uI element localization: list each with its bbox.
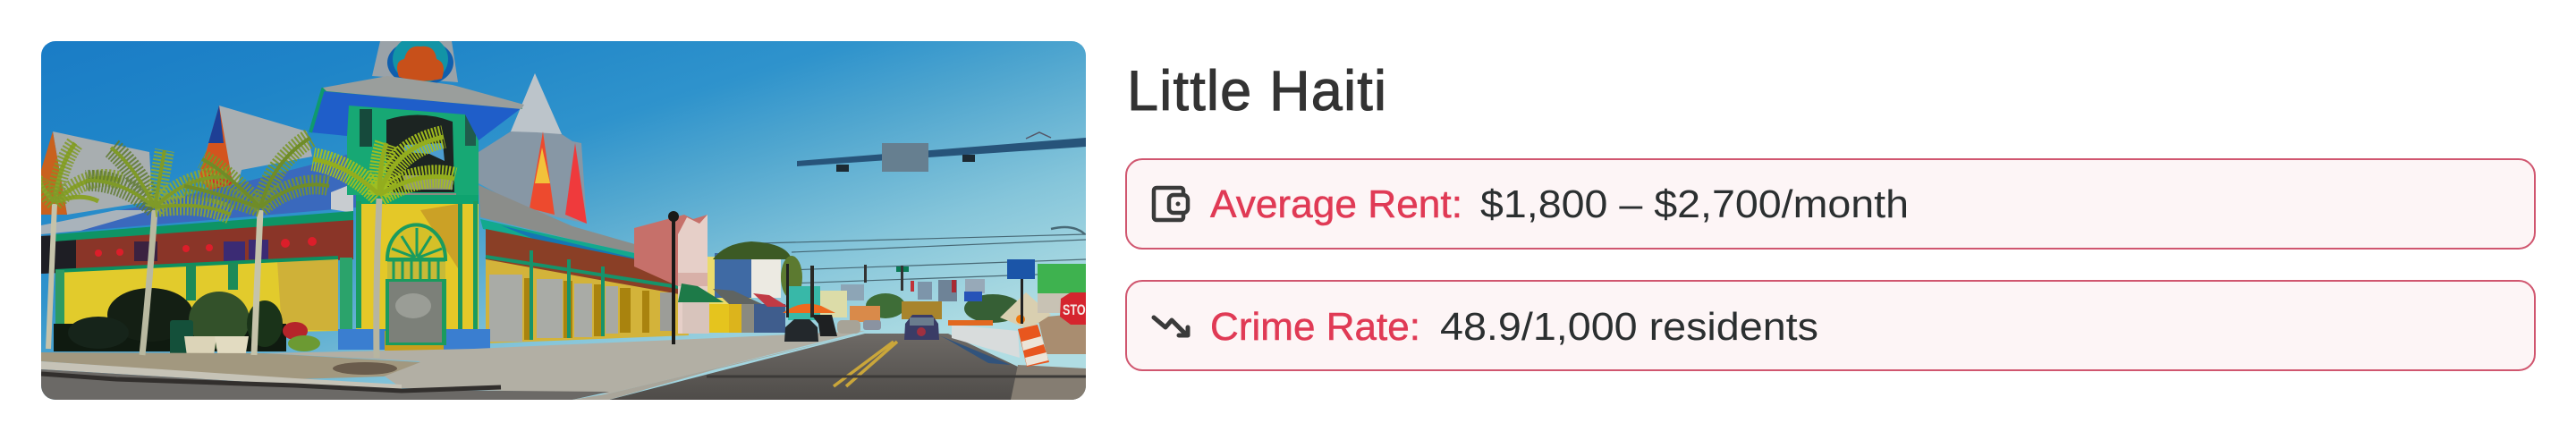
road construction: barrier, barrel, sand pile, signs	[939, 259, 1086, 367]
stop sign: STOP	[1063, 301, 1093, 318]
photo: Little Haiti street with colorful market building	[40, 35, 1093, 400]
sky	[41, 41, 1086, 400]
trash bin and planters	[170, 320, 249, 353]
palm 2	[86, 148, 231, 355]
overhead traffic signal arm	[797, 132, 1086, 172]
street buildings	[634, 215, 847, 334]
palm 3	[184, 138, 329, 355]
label: crime rate: Crime Rate:	[1210, 305, 1420, 349]
shrubs	[54, 288, 320, 351]
heading: Little Haiti: Little Haiti	[1127, 60, 1386, 123]
icon: wallet	[1154, 188, 1188, 220]
stat card: average rent	[1126, 159, 2535, 249]
tower upper: eave, roof and open belfry	[310, 76, 524, 199]
distant skyline and trees	[841, 265, 1021, 323]
main building lattice band	[41, 211, 353, 274]
back gables	[41, 106, 312, 215]
tower ornament	[372, 41, 458, 82]
right gables and roof	[479, 73, 634, 259]
stat card: crime rate	[1126, 281, 2535, 370]
tower arch and shutter door	[386, 224, 446, 345]
lamp post	[668, 211, 814, 344]
palm 1	[40, 143, 121, 349]
icon: trending down arrow	[1154, 317, 1188, 335]
palm trees	[40, 137, 454, 358]
neighborhood card	[41, 41, 2536, 400]
main roof	[41, 152, 356, 234]
cars	[784, 315, 939, 342]
right building lattice and wall	[486, 229, 698, 343]
tower lower body	[338, 195, 490, 351]
overhead wires	[760, 227, 1086, 283]
value: rent range: $1,800 – $2,700/month	[1480, 182, 1909, 226]
ground: sidewalk, planting strip, curb and road	[41, 331, 1086, 400]
label: average rent: Average Rent:	[1210, 182, 1462, 226]
stop sign	[1060, 292, 1086, 325]
yellow wall	[55, 258, 352, 336]
palm 4	[313, 137, 454, 358]
value: crime rate: 48.9/1,000 residents	[1440, 305, 1818, 349]
